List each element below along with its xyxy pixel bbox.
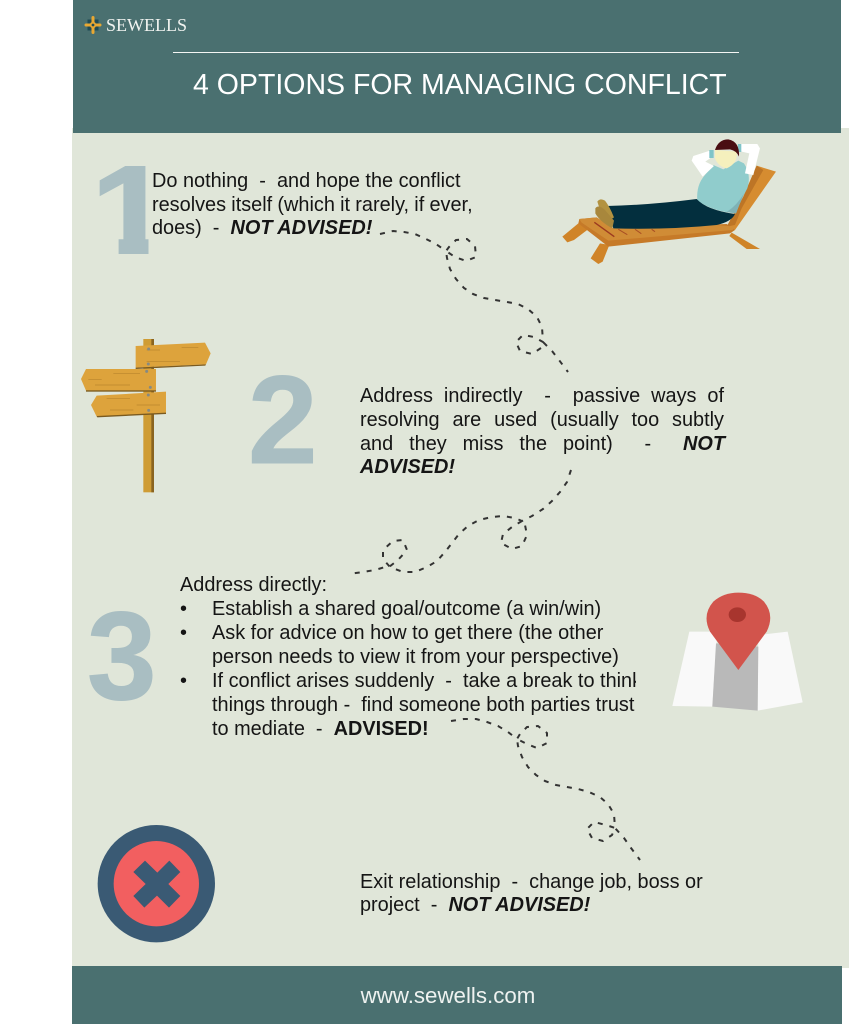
text block: option 2	[360, 385, 726, 478]
text block: option 4: project - NOT ADVISED!	[360, 894, 590, 916]
number 2: 2	[248, 351, 318, 490]
number 1: 1	[91, 141, 171, 280]
text block: option 2: ADVISED!	[360, 456, 455, 478]
footer URL: www.sewells.com	[361, 983, 535, 1008]
text block: option 2: resolving are used (usually too subtly	[360, 409, 724, 431]
text block: option 1: does) - NOT ADVISED!	[152, 217, 372, 239]
text block: option 3: •	[180, 598, 187, 620]
text block: option 2: and they miss the point) - NOT	[360, 433, 725, 455]
text block: option 3: things through - find someone both parties trust	[212, 694, 634, 716]
text block: option 4	[360, 871, 703, 916]
text block: option 1: Do nothing - and hope the conflict	[152, 170, 461, 192]
panel: footer band	[72, 966, 842, 1024]
panel: header band	[73, 0, 841, 133]
text block: option 3: •	[180, 670, 187, 692]
panel: main background	[72, 128, 849, 968]
text block: option 1: resolves itself (which it rarely, if ever,	[152, 194, 473, 216]
text block: option 3: to mediate - ADVISED!	[212, 718, 429, 740]
text block: option 3: If conflict arises suddenly - take a break to think	[212, 670, 636, 692]
number 3: 3	[87, 587, 157, 726]
text block: option 3: Ask for advice on how to get there (the other	[212, 622, 603, 644]
text block: option 3	[180, 574, 636, 740]
text block: option 3: •	[180, 622, 187, 644]
text block: option 4: Exit relationship - change job, boss or	[360, 871, 703, 893]
text block: option 2: Address indirectly - passive ways of	[360, 385, 724, 407]
text block: option 3: Address directly:	[180, 574, 327, 596]
text block: option 3: person needs to view it from your perspective)	[212, 646, 619, 668]
title: 4 OPTIONS FOR MANAGING CONFLICT	[193, 69, 727, 101]
text block: option 3: Establish a shared goal/outcome (a win/win)	[212, 598, 601, 620]
header rule	[173, 52, 739, 53]
text block: option 1	[152, 170, 473, 239]
brand name: SEWELLS	[106, 15, 187, 35]
